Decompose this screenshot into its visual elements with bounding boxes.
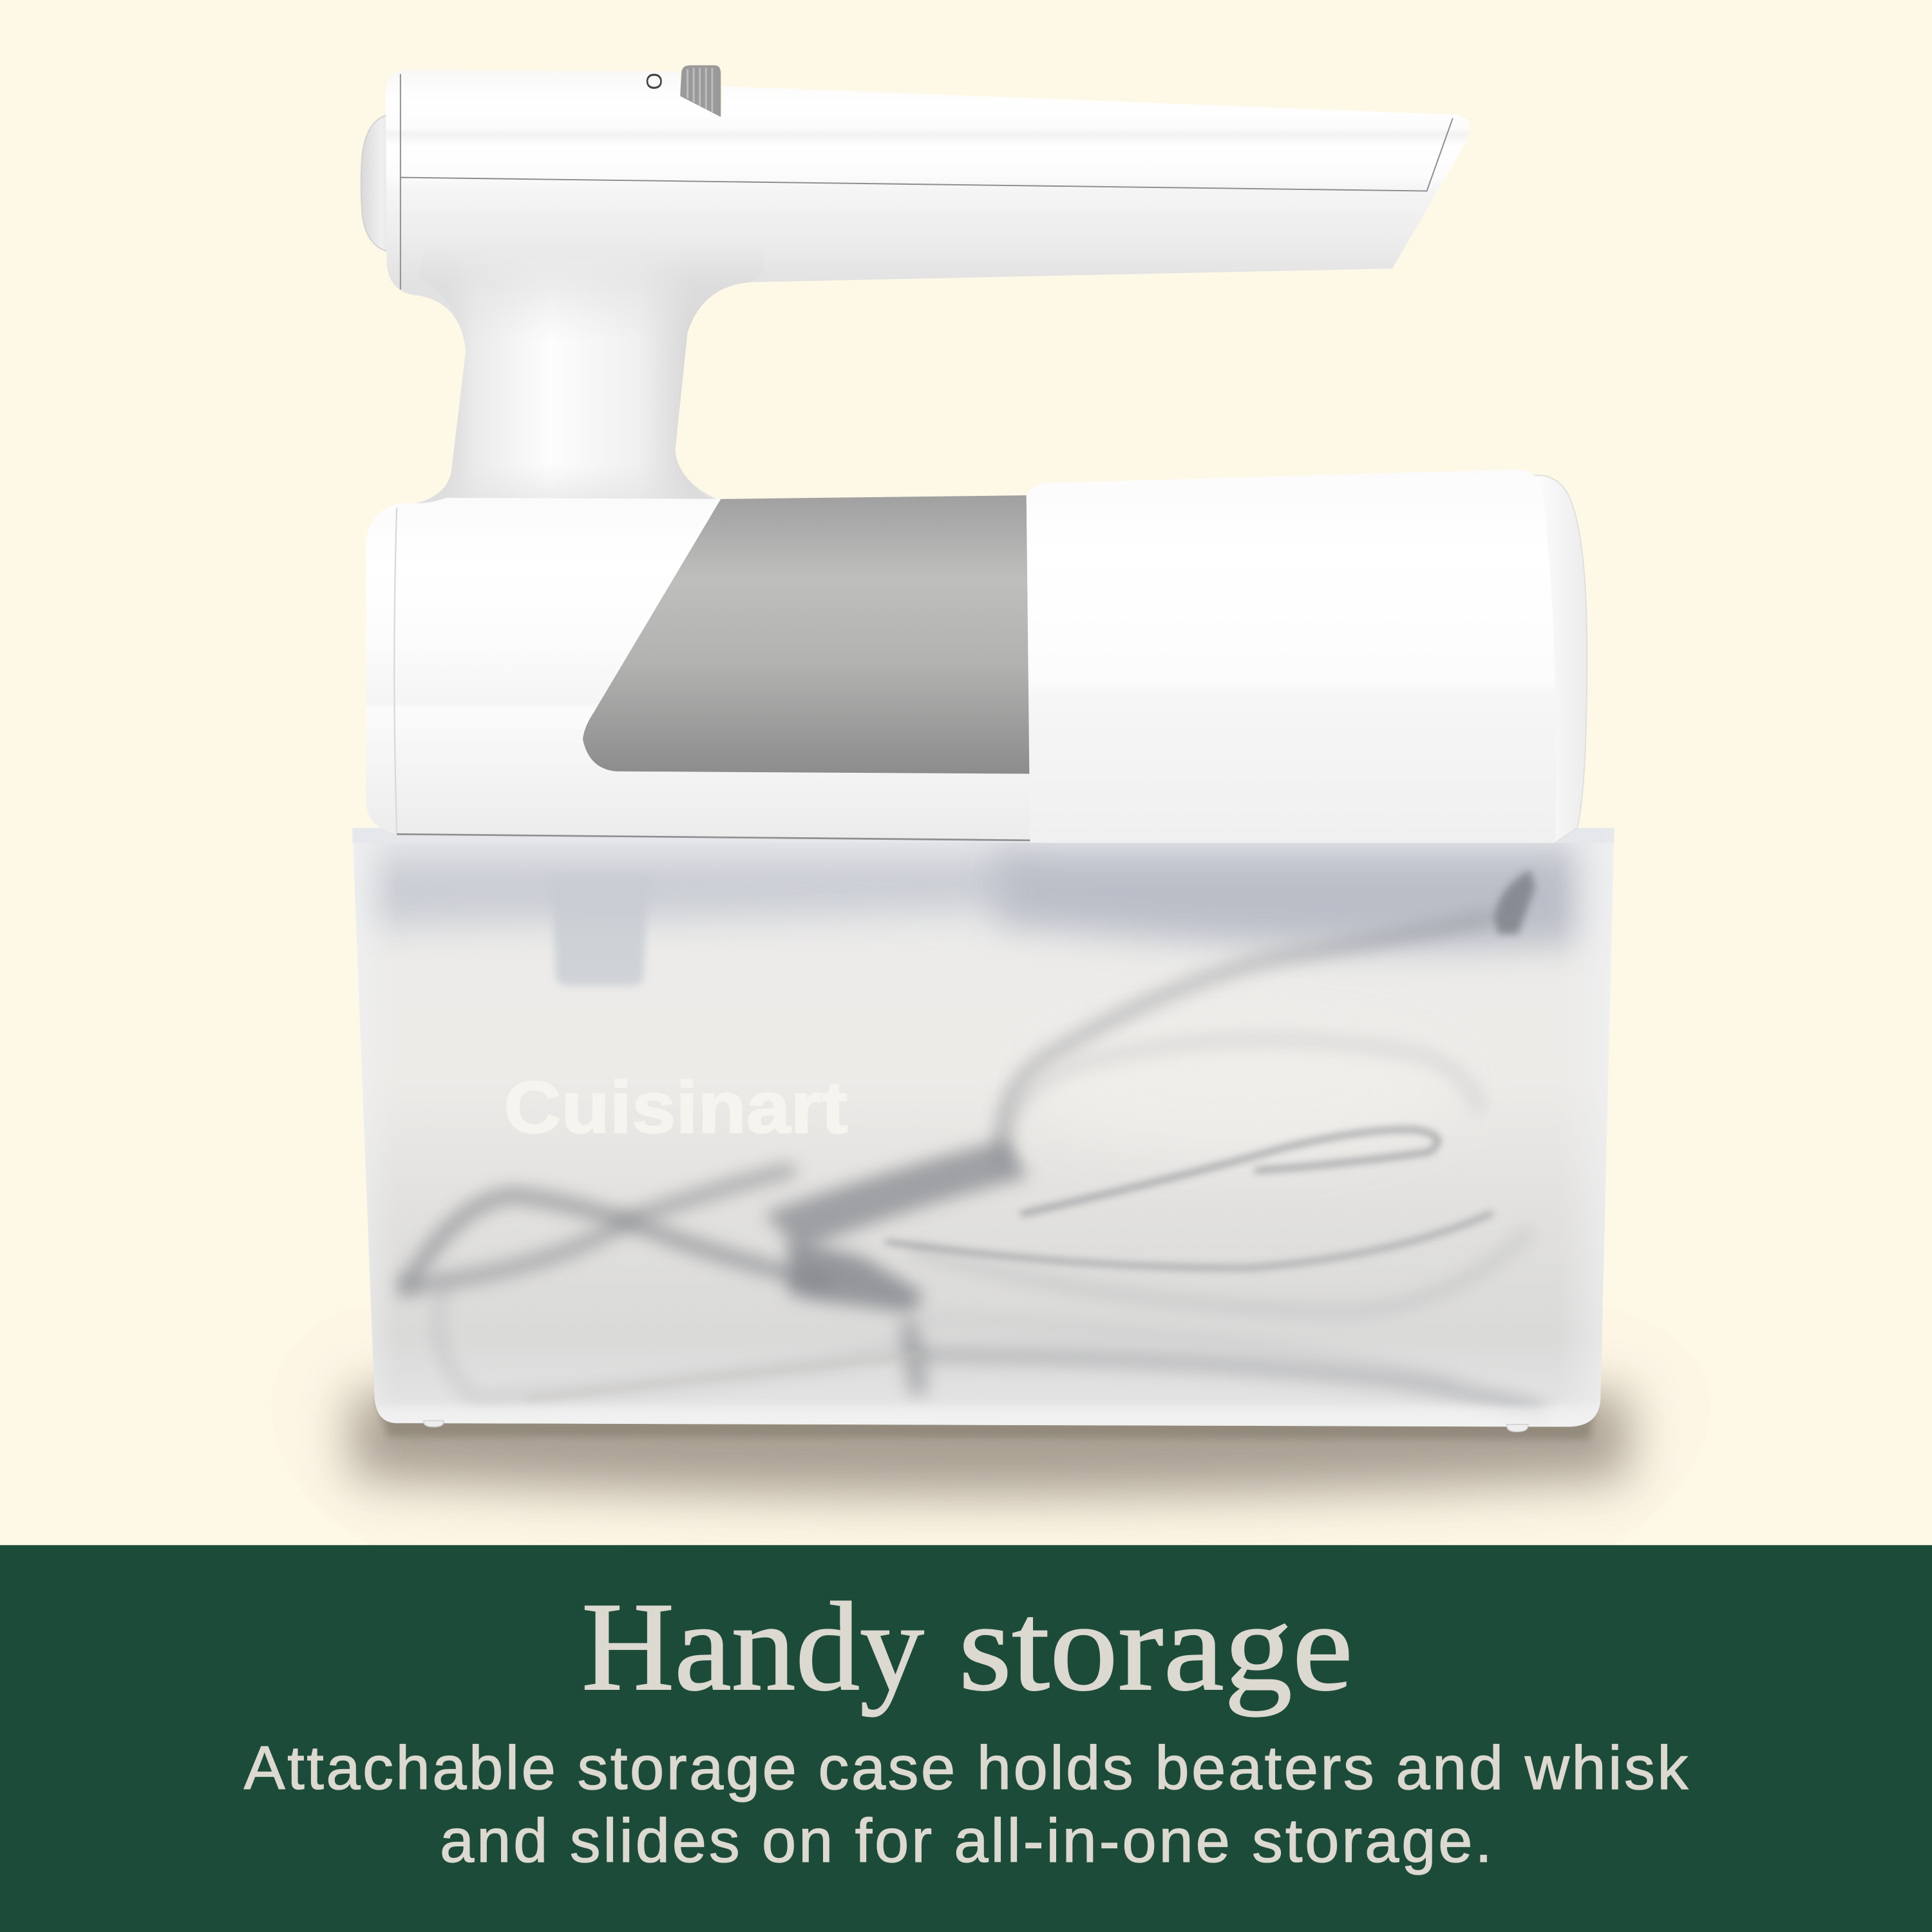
floor shadow xyxy=(316,1356,1665,1533)
speed dial xyxy=(680,65,721,117)
title: storage xyxy=(959,1576,1353,1717)
whisk knot xyxy=(764,1140,1029,1251)
storage case xyxy=(352,828,1614,1432)
title: Handy xyxy=(582,1576,924,1717)
whisk wires xyxy=(887,918,1528,1312)
beater block xyxy=(788,1238,924,1312)
hook tab xyxy=(551,877,649,986)
case rim xyxy=(352,828,1614,843)
dial zero marking: O xyxy=(642,73,667,90)
case edge highlight xyxy=(352,828,1614,1427)
whisk interior glow xyxy=(1035,1029,1454,1152)
body seam line xyxy=(394,507,397,833)
handle seam line xyxy=(401,74,1453,290)
handle and neck silhouette xyxy=(386,70,1470,505)
end cap of cylinder xyxy=(1528,475,1587,843)
neck shading xyxy=(406,247,788,507)
blurred contents of case xyxy=(357,850,1614,1432)
lower case highlight xyxy=(357,1407,1614,1432)
lower beater xyxy=(530,1318,1540,1411)
body bottom edge xyxy=(397,834,1030,840)
rear speed button xyxy=(361,113,394,252)
description text: and slides on for all-in-one storage. xyxy=(440,1806,1492,1875)
title xyxy=(582,1576,1353,1717)
motor body xyxy=(366,495,1030,840)
caption band xyxy=(0,1545,1932,1932)
translucent case shell xyxy=(352,828,1614,1427)
Cuisinart logo: Cuisinart xyxy=(504,1066,848,1148)
beater housing cylinder xyxy=(1027,469,1556,843)
hand mixer xyxy=(361,65,1587,843)
upper shadow band right xyxy=(998,850,1584,949)
description text: Attachable storage case holds beaters and whisk xyxy=(244,1734,1688,1803)
left beater xyxy=(406,1171,918,1399)
grey grip panel xyxy=(583,495,1030,774)
right tab xyxy=(1493,870,1535,934)
description text xyxy=(244,1734,1688,1875)
left case foot xyxy=(424,1421,444,1427)
right case foot xyxy=(1507,1425,1528,1432)
upper shadow band left xyxy=(365,857,1023,927)
